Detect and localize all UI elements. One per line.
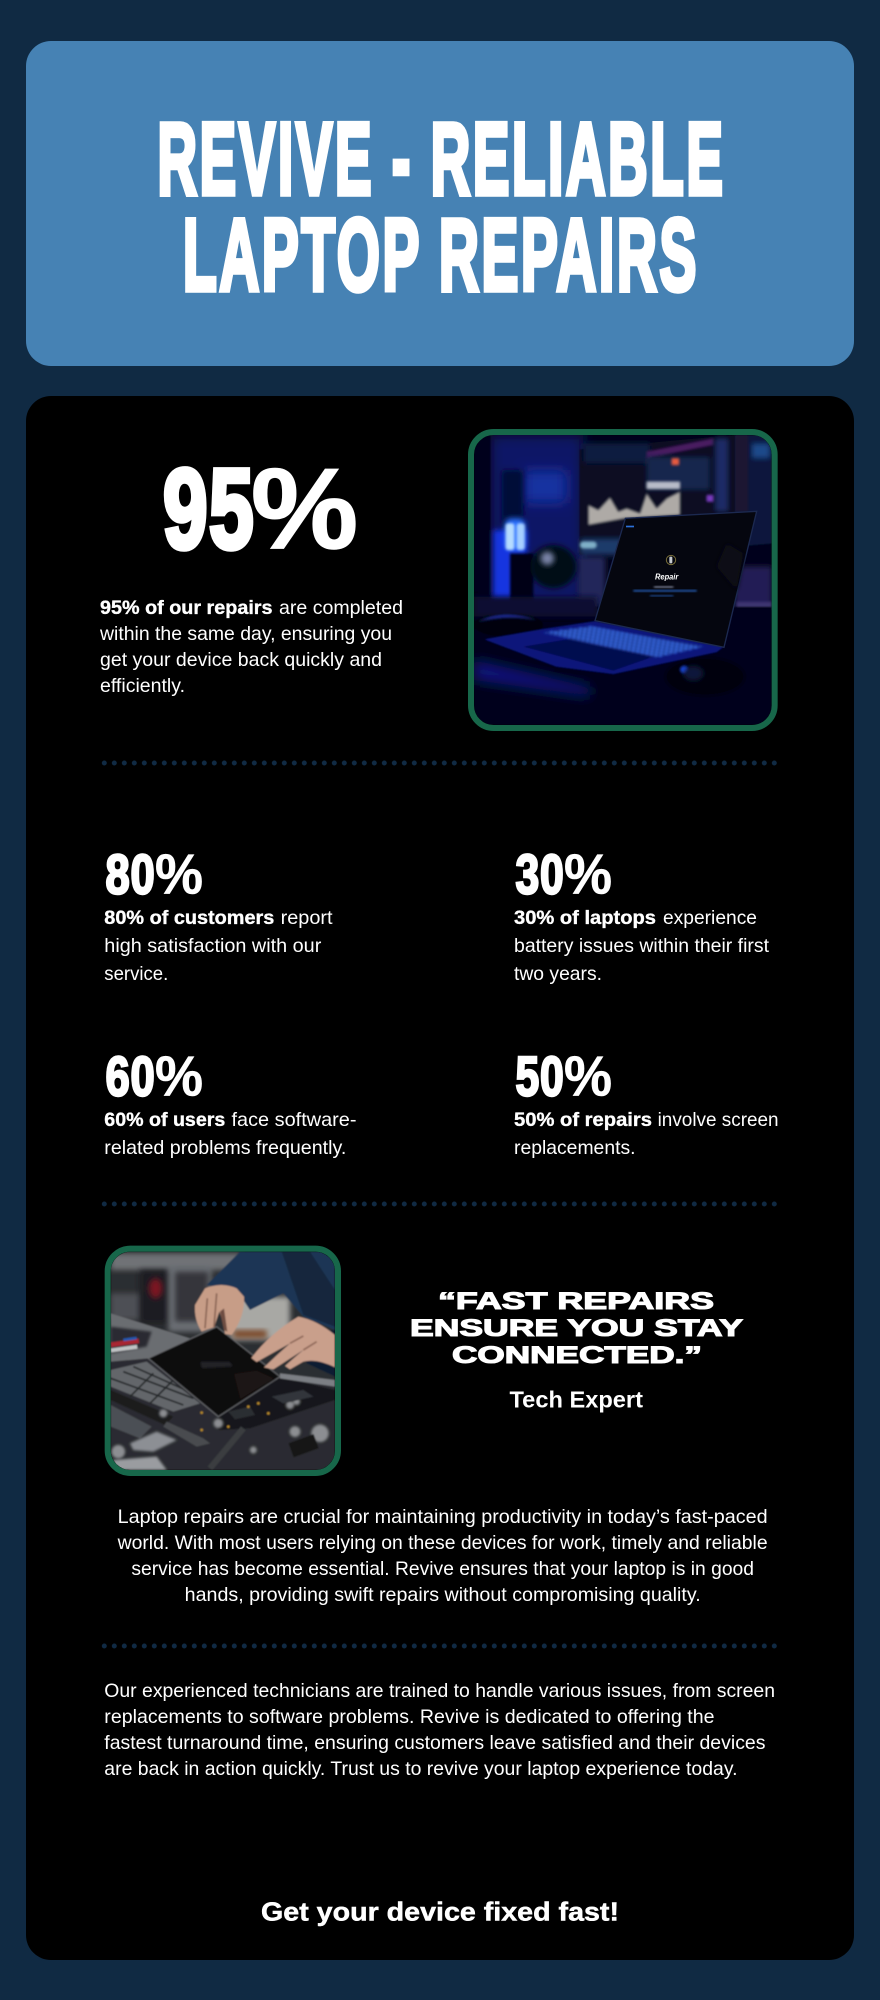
right hand	[251, 1317, 335, 1369]
stat text: 80% of customers	[104, 907, 274, 929]
stat: 60%: 60	[106, 1044, 156, 1108]
stat description: 95% of our repairs	[100, 597, 273, 619]
paragraph: technicians: replacements to software problems. Revive is dedicated to offering the	[104, 1706, 715, 1728]
stat: 80%: %	[155, 842, 203, 906]
image: laptop on a dark desk showing Repair screen: Repair	[655, 571, 679, 581]
title	[158, 102, 726, 312]
stat text	[514, 907, 770, 985]
paragraph: why repairs matter: world. With most users relying on these devices for work, timely and reliable	[117, 1532, 768, 1554]
laptop base	[485, 621, 723, 674]
big stat: 95%: %	[251, 446, 358, 573]
stat text	[104, 907, 333, 985]
sleeve	[207, 1252, 335, 1330]
stat: 80%	[104, 842, 333, 985]
quote: “FAST REPAIRS	[438, 1288, 714, 1315]
left hand	[195, 1285, 244, 1335]
stat text: related problems frequently.	[104, 1137, 346, 1159]
laptop base and keyboard	[114, 1358, 150, 1363]
paragraph: why repairs matter: hands, providing swift repairs without compromising quality.	[185, 1584, 701, 1606]
paragraph: why repairs matter: Laptop repairs are crucial for maintaining productivity in today’s fast-paced	[118, 1506, 768, 1528]
paragraph: technicians	[104, 1680, 775, 1780]
header panel	[26, 41, 854, 366]
paragraph: why repairs matter: service has become essential. Revive ensures that your laptop is in good	[131, 1558, 754, 1580]
stat text	[514, 1109, 779, 1159]
call to action: Get your device fixed fast!	[261, 1896, 619, 1926]
stat text: battery issues within their first	[514, 935, 770, 957]
stat description: within the same day, ensuring you	[99, 623, 392, 645]
big stat: 95%	[99, 446, 403, 697]
image: technician hands repairing an open laptop	[108, 1249, 338, 1473]
stat description: efficiently.	[100, 675, 185, 697]
stat text: involve screen	[658, 1109, 779, 1131]
stat text: two years.	[514, 963, 602, 985]
stat: 30%: %	[564, 842, 612, 906]
image: laptop on a dark desk showing Repair screen	[471, 432, 775, 728]
stat text: 60% of users	[104, 1109, 225, 1131]
paragraph: why repairs matter	[117, 1506, 768, 1606]
stat: 30%	[514, 842, 770, 985]
stat text: experience	[663, 907, 757, 929]
paragraph: technicians: fastest turnaround time, ensuring customers leave satisfied and their devices	[104, 1732, 766, 1754]
stat text: 30% of laptops	[514, 907, 656, 929]
image frame	[108, 1249, 338, 1473]
tablet screen	[148, 1327, 280, 1417]
stat text: high satisfaction with our	[104, 935, 322, 957]
stat: 60%: %	[155, 1044, 203, 1108]
main content panel	[26, 396, 854, 1960]
quote attribution: Tech Expert	[510, 1386, 643, 1412]
stat description	[99, 597, 403, 697]
stat: 50%: %	[564, 1044, 612, 1108]
mouse right	[666, 658, 744, 695]
stat text	[104, 1109, 356, 1159]
stat: 50%	[514, 1044, 779, 1159]
stat description: get your device back quickly and	[100, 649, 382, 671]
stat: 50%: 50	[516, 1044, 564, 1108]
quote: CONNECTED.”	[452, 1342, 702, 1369]
paragraph: technicians: Our experienced technicians are trained to handle various issues, from screen	[104, 1680, 775, 1702]
stat text: replacements.	[514, 1137, 636, 1159]
stat: 60%	[104, 1044, 356, 1159]
stat text: face software-	[232, 1109, 356, 1131]
quote: ENSURE YOU STAY	[410, 1315, 743, 1342]
paragraph: technicians: are back in action quickly. Trust us to revive your laptop experience today.	[104, 1758, 738, 1780]
stat: 80%: 80	[106, 842, 156, 906]
quote	[410, 1288, 743, 1369]
stat text: report	[281, 907, 333, 929]
stat text: service.	[104, 963, 168, 985]
big stat: 95%: 95	[163, 446, 255, 572]
image frame	[471, 432, 775, 728]
stat: 30%: 30	[516, 842, 564, 906]
stat description: are completed	[279, 597, 403, 619]
laptop screen	[595, 511, 757, 647]
stat text: 50% of repairs	[514, 1109, 652, 1131]
